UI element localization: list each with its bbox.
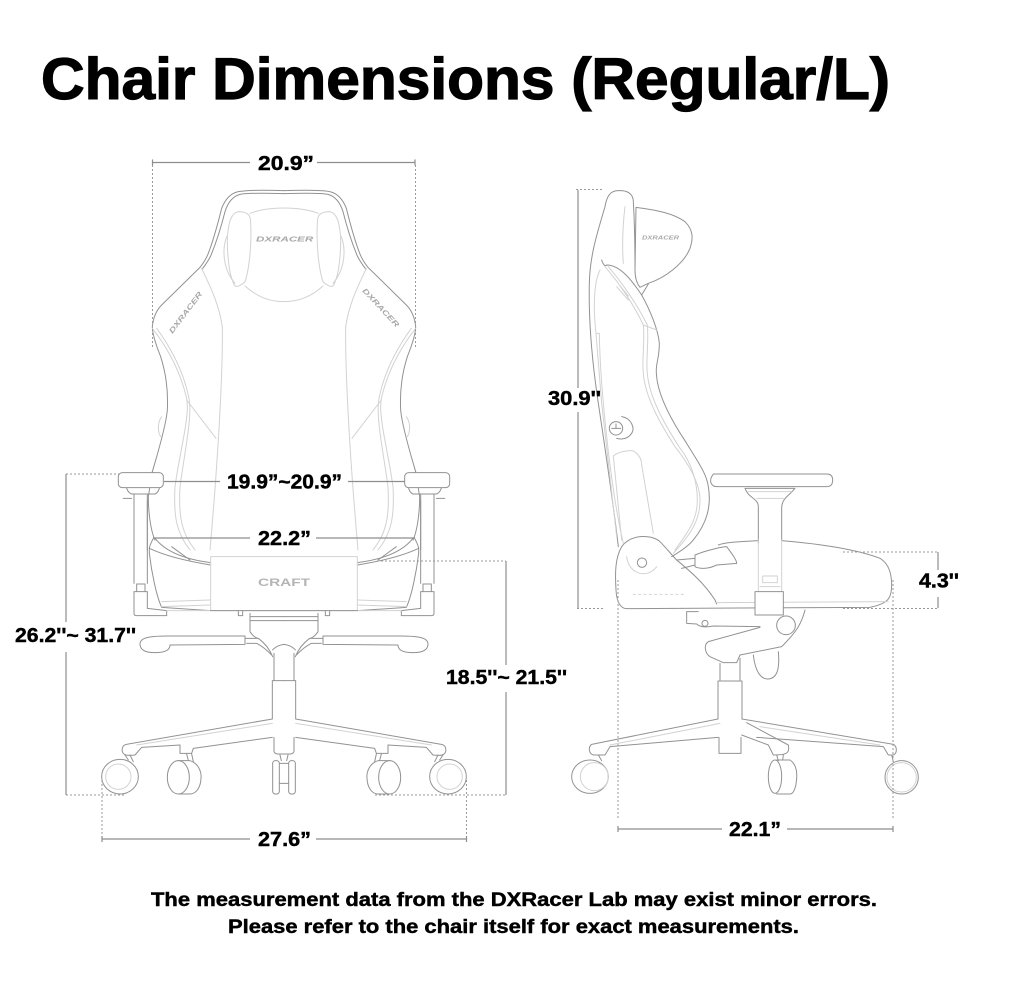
footnote [151, 890, 877, 938]
dimension: seat depth 22.1 [618, 580, 893, 841]
illustration: front view of chair [102, 190, 466, 794]
dimension: seat depth 22.1: 22.1” [729, 819, 781, 841]
dimension: armrest height 26.2~31.7 [15, 474, 136, 795]
dimension: back height 30.9 [548, 190, 603, 608]
chair front: left wing logo: DXRACER [167, 289, 205, 335]
chair front: backrest and armrests [118, 190, 450, 550]
footnote: Please refer to the chair itself for exact measurements. [228, 917, 799, 938]
dimension: armrest height 26.2~31.7: 26.2''~ 31.7'' [15, 625, 136, 647]
dimension: seat height 18.5~21.5 [375, 561, 567, 795]
dimension: seat thickness 4.3: 4.3'' [919, 570, 959, 592]
dimension: overall base width 27.6 [102, 780, 466, 851]
chair side: backrest, headrest and armrest [589, 191, 833, 557]
chair front: seat and base [102, 500, 466, 794]
illustration: side view of chair [572, 191, 918, 794]
dimension: seat width 22.2: 22.2” [258, 528, 311, 550]
dimension: overall base width 27.6: 27.6” [258, 829, 311, 851]
chair side: seat, mechanism and base [572, 536, 918, 794]
dimension: seat thickness 4.3 [843, 552, 959, 608]
dimension: backrest width 20.9: 20.9” [258, 153, 314, 175]
dimension: seat height 18.5~21.5: 18.5''~ 21.5'' [446, 667, 567, 689]
chair front: CRAFT seat label: CRAFT [258, 577, 310, 589]
title: Chair Dimensions (Regular/L) [41, 47, 890, 112]
chair side: headrest logo: DXRACER [642, 236, 679, 242]
dimension: back height 30.9: 30.9'' [548, 388, 601, 410]
footnote: The measurement data from the DXRacer Lab may exist minor errors. [151, 890, 877, 911]
chair front: headrest logo: DXRACER [256, 235, 314, 244]
dimension: arm spacing 19.9~20.9: 19.9”~20.9” [227, 472, 342, 494]
dimension: backrest width 20.9 [152, 153, 416, 347]
chair front: right wing logo: DXRACER [361, 286, 402, 330]
